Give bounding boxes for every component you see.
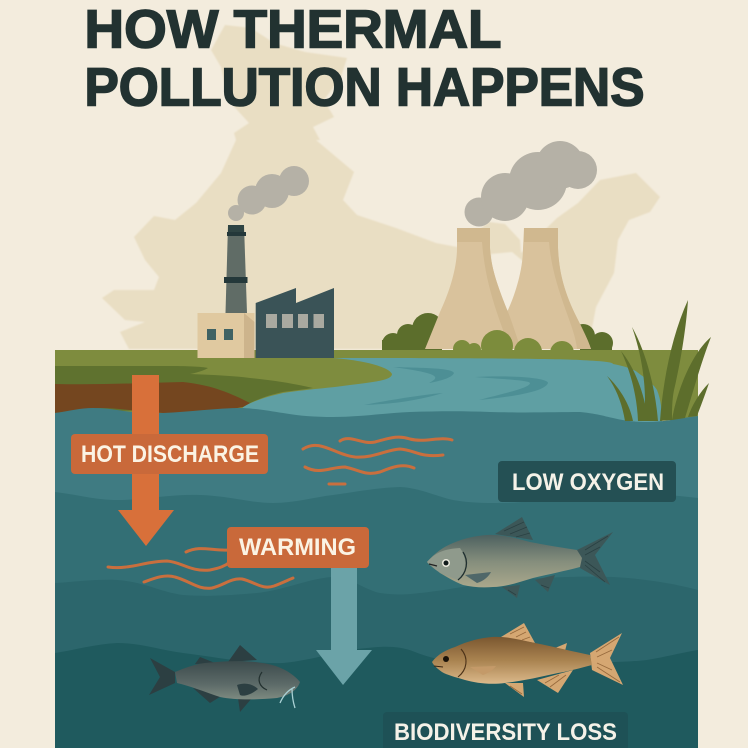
water layer 4 <box>55 643 698 748</box>
fish: brown <box>432 623 623 697</box>
reeds <box>607 300 711 421</box>
brown soil <box>55 382 250 413</box>
factory smoke <box>228 166 309 221</box>
label: warming: WARMING <box>239 534 356 561</box>
chimney <box>224 225 248 313</box>
heat waves lower <box>108 549 293 588</box>
cooling tower smoke <box>464 141 597 226</box>
water layer 1 <box>55 408 698 748</box>
dark factory building <box>256 288 334 358</box>
title: HOW THERMAL <box>84 0 502 60</box>
title: POLLUTION HAPPENS <box>84 58 644 118</box>
heat waves upper <box>303 437 452 484</box>
label: warming <box>227 527 369 568</box>
river ripples <box>364 367 548 405</box>
fish: catfish <box>149 645 300 712</box>
water layer 2 <box>55 487 698 748</box>
beige building <box>198 313 254 358</box>
label: hot discharge: HOT DISCHARGE <box>81 441 259 468</box>
label: biodiversity loss: BIODIVERSITY LOSS <box>394 719 617 746</box>
arrow: hot discharge <box>118 375 174 546</box>
dark land layer <box>55 366 313 413</box>
cooling tower right <box>490 228 591 349</box>
water layer 3 <box>55 577 698 748</box>
land <box>55 350 698 420</box>
label: hot discharge <box>71 434 268 474</box>
back bushes <box>382 313 613 355</box>
title <box>84 0 644 118</box>
front bushes <box>453 330 574 366</box>
river <box>240 358 662 424</box>
cooling tower left <box>425 228 521 349</box>
fish: grey <box>427 517 613 598</box>
label: low oxygen <box>498 461 676 502</box>
arrow: cooling down <box>316 568 372 685</box>
map silhouette <box>102 25 660 349</box>
label: low oxygen: LOW OXYGEN <box>512 469 664 496</box>
